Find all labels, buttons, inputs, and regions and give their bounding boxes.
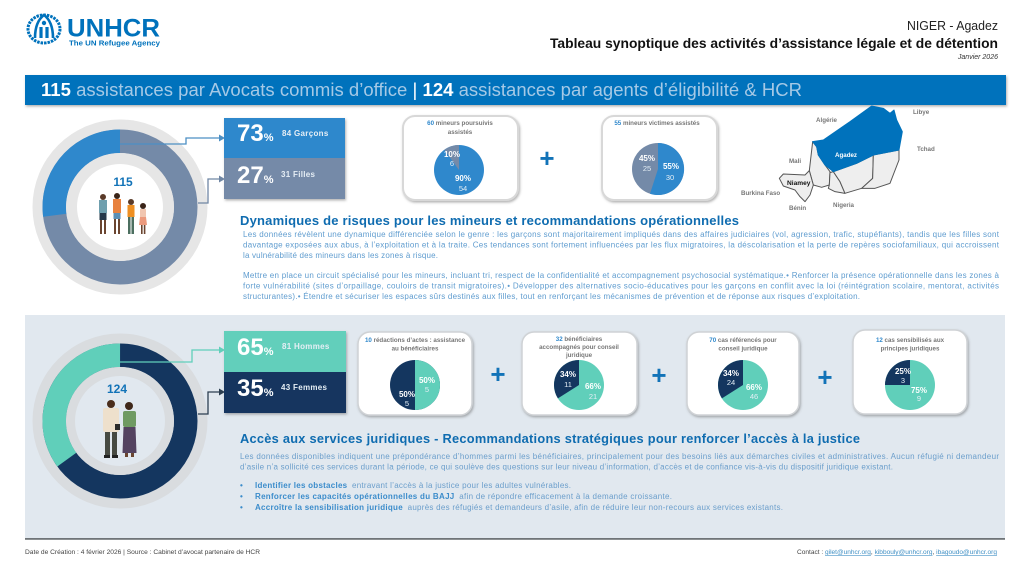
text block: analyse des risques <box>243 230 1000 260</box>
arrow: filles connector <box>198 176 225 203</box>
panel: cas référencés <box>687 332 799 415</box>
logo wordmark: UNHCR <box>67 14 160 42</box>
text block: analyse juridique: Les données disponibles indiquent une prépondérance d’hommes parmi les bénéficiaires, principalement pour des besoins liés aux démarches civiles et administratives. Aucun réfugié ni demandeur <box>240 452 999 461</box>
footer: contact: Contact : gilet@unhcr.org , kibbouly@unhcr.org , ibagoudo@unhcr.org <box>797 550 997 556</box>
donut chart: 124 adults by gender <box>28 329 212 513</box>
card title: conseil juridique <box>718 346 768 352</box>
map labels: Algérie <box>816 117 838 124</box>
pie chart: 66 / 34: 21 <box>589 392 597 401</box>
icon: four children <box>99 193 147 234</box>
pie chart: 90 / 10: 90% <box>455 174 471 183</box>
pie chart: 90 / 10: 6 <box>450 159 454 168</box>
card title: accompagnés pour conseil <box>539 344 619 351</box>
icon: plus: + <box>651 360 667 390</box>
card title: 10 rédactions d’actes : assistance <box>365 337 465 344</box>
bullet: capacités: • <box>240 492 243 501</box>
pie chart: 75 / 25: 25% <box>895 367 911 376</box>
pie chart: 66 / 34: 11 <box>564 380 572 389</box>
map labels: Nigeria <box>833 202 855 209</box>
pie chart: 50 / 50: 50% <box>399 390 415 399</box>
panel: rédactions d'actes <box>358 332 472 415</box>
text block: analyse des risques: davantage exposées aux abus, à l’exploitation et à la traite. Ces tendances sont fortement influencées par les flux migratoires, la déscolarisation et la perte de repères sociofamiliaux, qui accroissent <box>243 240 1000 250</box>
pie chart: 66 / 34: 24 <box>727 378 735 387</box>
pie chart: 75 / 25 <box>885 360 935 410</box>
pie chart: 55 / 45: 45% <box>639 154 655 163</box>
bullet: capacités <box>240 486 672 503</box>
bullet: obstacles: Identifier les obstacles entravant l’accès à la justice pour les adultes vulnérables. <box>255 475 571 492</box>
icon: plus: + <box>490 359 506 389</box>
pie chart: 75 / 25: 75% <box>911 386 927 395</box>
stat panel: hommes / femmes <box>224 331 346 413</box>
arrow: garçons connector <box>120 134 225 144</box>
date: Janvier 2026 <box>957 54 998 61</box>
icon: plus: + <box>539 143 555 173</box>
card title: 60 mineurs poursuivis <box>427 120 493 127</box>
location: NIGER - Agadez <box>907 19 998 33</box>
bullet: sensibilisation: • <box>240 503 243 512</box>
text block: analyse juridique: d’asile n’a sollicité ces services durant la période, ce qui soulève des questions sur leur niveau d’information, d’accès et de confiance vis-à-vis du dispositif juridique existant. <box>240 462 893 472</box>
panel: mineurs victimes <box>602 116 717 200</box>
text block: analyse juridique <box>240 452 999 472</box>
map labels: Bénin <box>789 205 806 212</box>
panel: section services juridiques background <box>25 315 1005 539</box>
text block: recommandations: Mettre en place un circuit spécialisé pour les mineurs, incluant tri, respect de la confidentialité et accompagnement psychosocial systématique.• Renforcer la présence opérationnelle dans les zones à <box>243 271 1000 280</box>
pie chart: 66 / 34 <box>554 360 604 410</box>
pie chart: 50 / 50: 50% <box>419 376 435 385</box>
icon: plus: + <box>817 362 833 392</box>
pie chart: 90 / 10: 10% <box>444 150 460 159</box>
pie chart: 55 / 45: 30 <box>666 173 674 182</box>
stat: hommes <box>224 331 346 372</box>
pie chart: 50 / 50: 5 <box>425 385 429 394</box>
card title: juridique <box>565 352 593 359</box>
stat: hommes: 65% <box>237 334 274 361</box>
bullet: obstacles <box>240 475 571 492</box>
stat: garçons: 84 Garçons <box>282 129 329 138</box>
pie chart: 66 / 34: 34% <box>723 369 739 378</box>
footer: source: Date de Création : 4 février 2026 | Source : Cabinet d’avocat partenaire de HCR <box>25 550 261 556</box>
pie chart: 75 / 25: 9 <box>917 394 921 403</box>
stat: filles <box>224 158 345 199</box>
card title: 55 mineurs victimes assistés <box>614 120 700 127</box>
map labels <box>741 109 935 212</box>
icon: man and woman <box>103 400 136 458</box>
pie chart: 66 / 34: 66% <box>585 382 601 391</box>
map labels: Burkina Faso <box>741 190 780 197</box>
donut total: 115 <box>113 175 133 189</box>
donut total: 124 <box>107 382 127 396</box>
stat: garçons <box>224 118 345 158</box>
text block: analyse des risques: Les données révèlent une dynamique différenciée selon le genre : les garçons sont majoritairement impliqués dans des affaires judiciaires (vol, agression, trafic, stupéfiants), tandis que les filles sont <box>243 230 1000 239</box>
heading: dynamiques de risques: Dynamiques de risques pour les mineurs et recommandations opérationnelles <box>240 213 739 228</box>
pie chart: 66 / 34 <box>718 360 768 410</box>
map labels: Mali <box>789 158 801 165</box>
pie chart: 75 / 25: 3 <box>901 376 905 385</box>
map labels: Agadez <box>835 152 857 159</box>
pie chart: 90 / 10: 54 <box>459 184 467 193</box>
panel: cas sensibilisés <box>853 330 967 414</box>
stat: filles: 31 Filles <box>281 170 316 179</box>
text block: analyse des risques: la vulnérabilité des mineurs dans les zones à risque. <box>243 251 438 260</box>
text block: recommandations: forte vulnérabilité (sites d’orpaillage, couloirs de transit migratoires).• Développer des alternatives socio-éducatives pour les garçons en conflit avec la loi (réintégration scolaire, mentorat, activités <box>243 282 999 290</box>
bullet: sensibilisation: Accroître la sensibilisation juridique auprès des réfugiés et demandeurs d’asile, afin de réduire leur non-recours aux services existants. <box>255 497 783 514</box>
pie chart: 66 / 34: 46 <box>750 392 758 401</box>
text block: recommandations <box>243 271 1000 301</box>
pie chart: 50 / 50: 5 <box>405 399 409 408</box>
pie chart: 90 / 10 <box>434 145 484 195</box>
icon: UNHCR emblem <box>28 15 60 43</box>
arrow: hommes connector <box>120 346 225 362</box>
arrow: femmes connector <box>198 388 225 414</box>
card title: 32 bénéficiaires <box>556 336 602 343</box>
card title: principes juridiques <box>881 346 940 352</box>
title block <box>550 19 998 61</box>
stat: garçons: 73% <box>237 120 274 147</box>
pie chart: 55 / 45: 55% <box>663 162 679 171</box>
bullet: sensibilisation <box>240 497 783 514</box>
stat panel: garçons / filles <box>224 118 345 199</box>
pie chart: 66 / 34: 66% <box>746 383 762 392</box>
card title: 12 cas sensibilisés aux <box>876 337 944 344</box>
map labels: Niamey <box>787 180 811 187</box>
bullet: obstacles: • <box>240 481 243 490</box>
logo tagline: The UN Refugee Agency <box>69 38 161 48</box>
map labels: Tchad <box>917 146 935 153</box>
logo: UNHCR <box>28 14 161 48</box>
card title: assistés <box>448 129 473 136</box>
stat: filles: 27% <box>237 162 274 189</box>
text block: recommandations: structurantes).• Étendre et sécuriser les espaces sûrs destinés aux filles, tout en renforçant les mécanismes de prévention et de réponse aux risques d’exploitation. <box>243 292 860 301</box>
pie chart: 66 / 34: 34% <box>560 370 576 379</box>
card title: au bénéficiaires <box>392 346 439 352</box>
panel: mineurs poursuivis <box>403 116 518 200</box>
stat: femmes: 43 Femmes <box>281 383 328 392</box>
panel: bénéficiaires accompagnés <box>522 332 637 415</box>
banner: totals <box>25 75 1006 105</box>
map labels: Libye <box>913 109 930 116</box>
pie chart: 55 / 45 <box>632 143 684 195</box>
map: Niger regions <box>741 106 935 212</box>
card title: 70 cas référencés pour <box>709 337 777 344</box>
donut chart: 115 minors by gender <box>32 120 208 294</box>
stat: femmes: 35% <box>237 375 274 402</box>
main title: Tableau synoptique des activités d’assistance légale et de détention <box>550 35 998 51</box>
banner text: 115 assistances par Avocats commis d’office | 124 assistances par agents d’éligibilité & HCR <box>41 79 802 100</box>
stat: hommes: 81 Hommes <box>282 342 330 351</box>
stat: femmes <box>224 372 346 413</box>
list: recommandations stratégiques <box>240 475 783 514</box>
pie chart: 50 / 50 <box>390 360 440 410</box>
heading: accès aux services juridiques: Accès aux services juridiques - Recommandations stratégiques pour renforcer l’accès à la justice <box>240 431 860 446</box>
bullet: capacités: Renforcer les capacités opérationnelles du BAJJ afin de répondre efficacement à la demande croissante. <box>255 486 672 503</box>
pie chart: 55 / 45: 25 <box>643 164 651 173</box>
